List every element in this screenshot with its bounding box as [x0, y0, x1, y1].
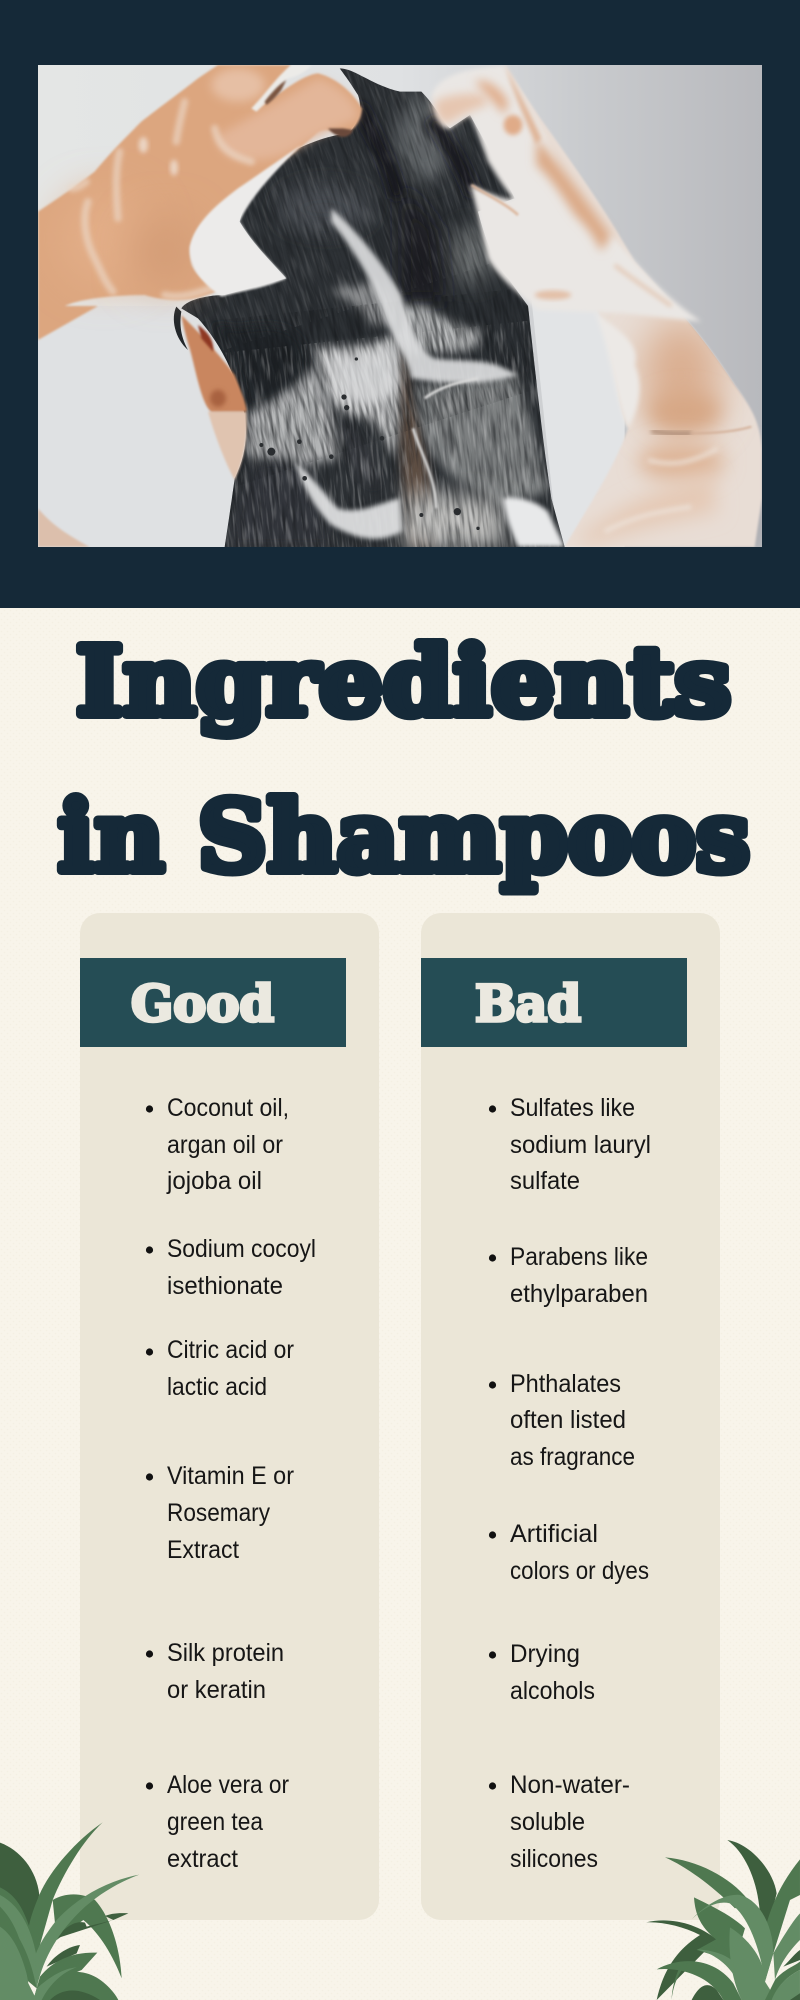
plant: bottom left — [0, 1822, 139, 2000]
header band — [0, 0, 800, 628]
list of good ingredients — [146, 1094, 316, 1873]
list of good ingredients: isethionate — [167, 1272, 283, 1300]
bottom left shoulder — [38, 508, 90, 547]
panel: good ingredients — [80, 913, 379, 1920]
heading bar: Bad — [421, 958, 687, 1047]
list of bad ingredients: Non-water- — [510, 1771, 630, 1799]
heading bar: Good: Good — [131, 974, 274, 1033]
list of good ingredients: Coconut oil, — [167, 1094, 289, 1122]
list of good ingredients: Vitamin E or — [167, 1462, 294, 1490]
list of good ingredients: Extract — [167, 1536, 239, 1564]
list of bad ingredients: Phthalates — [510, 1370, 621, 1398]
foam on hand edge — [190, 145, 301, 297]
panel: bad ingredients — [421, 913, 720, 1920]
photo: hands washing soapy hair — [38, 65, 762, 547]
list of good ingredients: Rosemary — [167, 1499, 270, 1527]
soap foam over hair — [246, 278, 505, 547]
list of bad ingredients: sulfate — [510, 1167, 580, 1195]
list of bad ingredients: ethylparaben — [510, 1280, 648, 1308]
right upper arm — [505, 65, 762, 547]
list of bad ingredients: Sulfates like — [510, 1094, 635, 1122]
title: Ingredients — [76, 626, 731, 738]
list of bad ingredients: alcohols — [510, 1677, 595, 1705]
ear and neck — [174, 307, 247, 480]
list of bad ingredients — [489, 1094, 651, 1873]
list of bad ingredients: soluble — [510, 1808, 585, 1836]
title — [58, 626, 750, 894]
bright foam bands — [295, 208, 565, 547]
list of good ingredients: Aloe vera or — [167, 1771, 289, 1799]
list of bad ingredients: often listed — [510, 1406, 626, 1434]
list of good ingredients: jojoba oil — [166, 1167, 262, 1195]
hair strand texture — [184, 68, 537, 476]
list of good ingredients: extract — [167, 1845, 238, 1873]
heading bar: Good — [80, 958, 346, 1047]
list of bad ingredients: Parabens like — [510, 1243, 648, 1271]
list of good ingredients: argan oil or — [167, 1131, 283, 1159]
plant: bottom right — [646, 1840, 800, 2000]
list of good ingredients: green tea — [167, 1808, 263, 1836]
list of good ingredients: Sodium cocoyl — [167, 1235, 316, 1263]
title: in Shampoos — [58, 780, 750, 894]
list of good ingredients: lactic acid — [167, 1373, 267, 1401]
list of bad ingredients: silicones — [510, 1845, 598, 1873]
list of bad ingredients: Drying — [510, 1640, 580, 1668]
heading bar: Bad: Bad — [475, 974, 581, 1033]
hair — [182, 68, 565, 547]
right hand, foam and wrist — [432, 65, 701, 322]
list of good ingredients: Citric acid or — [167, 1336, 294, 1364]
left arm and hand — [38, 65, 362, 340]
list of bad ingredients: as fragrance — [510, 1443, 635, 1471]
list of bad ingredients: sodium lauryl — [510, 1131, 651, 1159]
list of good ingredients: or keratin — [167, 1676, 266, 1704]
bubbles — [259, 357, 480, 530]
list of good ingredients: Silk protein — [167, 1639, 284, 1667]
list of bad ingredients: Artificial — [510, 1520, 598, 1548]
list of bad ingredients: colors or dyes — [510, 1557, 649, 1585]
